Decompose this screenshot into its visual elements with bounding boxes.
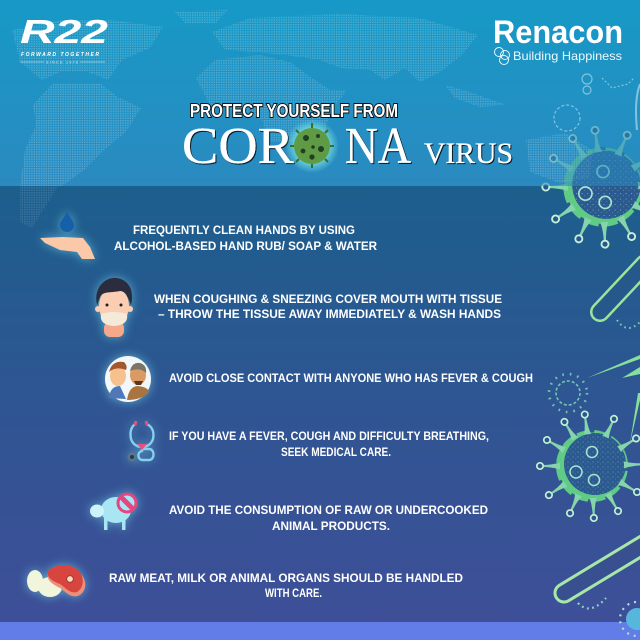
icon: stethoscope xyxy=(129,421,154,460)
item 6: handle raw meat with care xyxy=(27,565,463,600)
icon: man with mask xyxy=(95,278,133,337)
icon: eggs and steak xyxy=(27,565,85,597)
logo: R22: SINCE 1976 xyxy=(46,60,78,64)
molecule below upper bacillus xyxy=(617,320,640,328)
icon: water drop over hand xyxy=(40,212,95,259)
item 3: avoid close contact xyxy=(105,356,533,402)
virus illustration: middle right xyxy=(537,411,640,521)
item 4: seek medical care: SEEK MEDICAL CARE. xyxy=(281,445,391,459)
item 6: handle raw meat with care: RAW MEAT, MILK OR ANIMAL ORGANS SHOULD BE HANDLED xyxy=(109,571,463,585)
item 4: seek medical care xyxy=(129,421,489,460)
logo: Renacon: Building Happiness xyxy=(513,49,622,63)
item 2: cover coughs: WHEN COUGHING & SNEEZING COVER MOUTH WITH TISSUE xyxy=(154,292,502,306)
icon: sheep with prohibition sign xyxy=(90,494,136,530)
item 4: seek medical care: IF YOU HAVE A FEVER, COUGH AND DIFFICULTY BREATHING, xyxy=(169,429,489,443)
virus illustration: bottom right corner xyxy=(620,602,640,636)
bacillus: upper xyxy=(600,264,640,312)
icon: two coughing people xyxy=(105,356,151,402)
faint molecules and virus outlines, top right xyxy=(554,74,640,131)
dotted world map xyxy=(12,10,592,228)
title: protect yourself from: PROTECT YOURSELF FROM xyxy=(190,100,398,121)
footer bar xyxy=(0,622,640,640)
bacillus: lower xyxy=(564,544,640,593)
item 5: avoid raw animal products: AVOID THE CONSUMPTION OF RAW OR UNDERCOOKED xyxy=(169,503,488,517)
item 1: clean hands xyxy=(40,212,377,259)
background: lower panel xyxy=(0,186,640,622)
item 2: cover coughs xyxy=(95,278,502,337)
logo: Renacon: Renacon xyxy=(493,14,623,50)
title: corona virus: VIRUS xyxy=(424,137,513,170)
molecule below lower bacillus xyxy=(578,598,606,608)
item 2: cover coughs: – THROW THE TISSUE AWAY IMMEDIATELY & WASH HANDS xyxy=(158,307,501,321)
item 5: avoid raw animal products xyxy=(90,494,488,533)
virus illustration: small ring xyxy=(549,374,587,412)
virus illustration: top right, banner part xyxy=(542,126,640,186)
item 6: handle raw meat with care: WITH CARE. xyxy=(265,586,322,600)
item 1: clean hands: FREQUENTLY CLEAN HANDS BY USING xyxy=(133,223,355,237)
title: corona virus: NA xyxy=(345,118,411,175)
item 1: clean hands: ALCOHOL-BASED HAND RUB/ SOAP & WATER xyxy=(114,239,377,253)
item 5: avoid raw animal products: ANIMAL PRODUCTS. xyxy=(272,519,390,533)
title: corona virus xyxy=(182,118,513,175)
icon: rings xyxy=(494,48,510,64)
logo: R22: FORWARD TOGETHER xyxy=(21,52,99,58)
background: upper banner xyxy=(0,0,640,186)
item 3: avoid close contact: AVOID CLOSE CONTACT WITH ANYONE WHO HAS FEVER & COUGH xyxy=(169,371,533,385)
bacillus: thin strands xyxy=(587,355,640,443)
title: corona virus: COR xyxy=(182,118,294,175)
icon: green coronavirus letter O xyxy=(285,119,339,173)
logo: R22 xyxy=(20,13,109,64)
logo: R22: R22 xyxy=(20,13,109,50)
virus illustration: top right, panel part xyxy=(541,186,640,249)
logo: Renacon xyxy=(493,14,623,64)
